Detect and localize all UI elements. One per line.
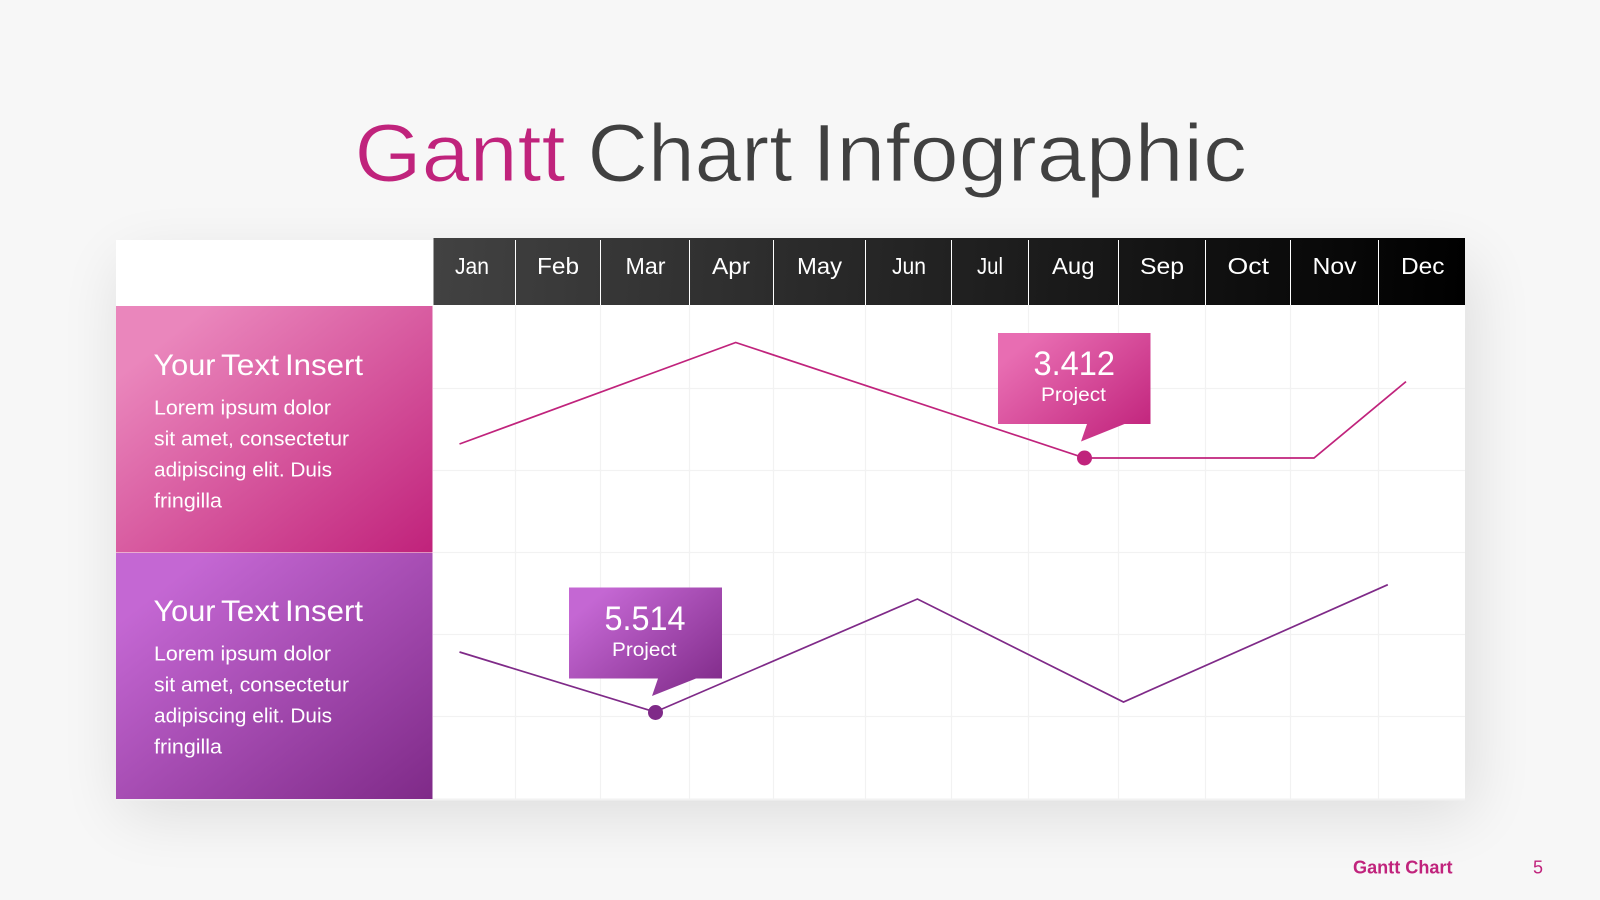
panel: pink row label <box>116 306 432 552</box>
month header: Oct <box>1228 253 1270 279</box>
month header: Jul <box>977 253 1003 279</box>
panel: pink row label: fringilla <box>154 490 223 512</box>
panel: purple row label: adipiscing elit. Duis <box>154 704 332 728</box>
panel: purple row label: Text <box>221 595 280 628</box>
panel: purple row label: Insert <box>285 595 364 628</box>
panel: pink row label: adipiscing elit. Duis <box>154 458 332 482</box>
panel: purple row label <box>116 553 432 799</box>
title: Infographic <box>812 108 1247 199</box>
panel: purple row label: fringilla <box>154 736 223 758</box>
month header: Feb <box>537 253 579 279</box>
card shadow <box>122 262 1472 814</box>
line chart: purple series <box>460 585 1388 720</box>
callout: 3.412 project: Project <box>1041 384 1107 406</box>
month header: May <box>797 253 843 279</box>
line chart: pink series <box>460 342 1406 466</box>
month header: Sep <box>1140 253 1184 279</box>
panel: pink row label: sit amet, consectetur <box>154 428 349 450</box>
panel: purple row label: sit amet, consectetur <box>154 674 349 696</box>
month header: Jan <box>455 253 489 279</box>
month header: Aug <box>1052 253 1094 279</box>
title: Gantt <box>354 108 566 199</box>
footer label: Gantt Chart <box>1353 858 1453 878</box>
panel: pink row label: Your <box>154 349 216 382</box>
gantt table <box>116 238 1465 800</box>
month header: Jun <box>892 253 926 279</box>
month header <box>434 238 1465 305</box>
month header: Nov <box>1312 253 1357 279</box>
callout: 5.514 project <box>569 588 722 696</box>
month header: Mar <box>626 253 666 279</box>
callout: 3.412 project <box>998 333 1150 442</box>
callout: 5.514 project: Project <box>612 639 677 661</box>
page number: 5 <box>1533 858 1543 878</box>
panel: pink row label: Insert <box>285 349 364 382</box>
month header: Dec <box>1401 253 1444 279</box>
callout: 5.514 project: 5.514 <box>604 600 686 638</box>
white card background <box>116 240 1465 800</box>
chart grid <box>116 305 1465 800</box>
title <box>354 108 1247 199</box>
month header: Apr <box>712 253 750 279</box>
panel: pink row label: Lorem ipsum dolor <box>154 396 331 420</box>
header bar <box>434 238 1465 305</box>
panel: pink row label: Text <box>221 349 280 382</box>
title: Chart <box>588 108 793 199</box>
panel: purple row label: Lorem ipsum dolor <box>154 642 331 666</box>
callout: 3.412 project: 3.412 <box>1034 345 1115 383</box>
panel: purple row label: Your <box>154 595 216 628</box>
